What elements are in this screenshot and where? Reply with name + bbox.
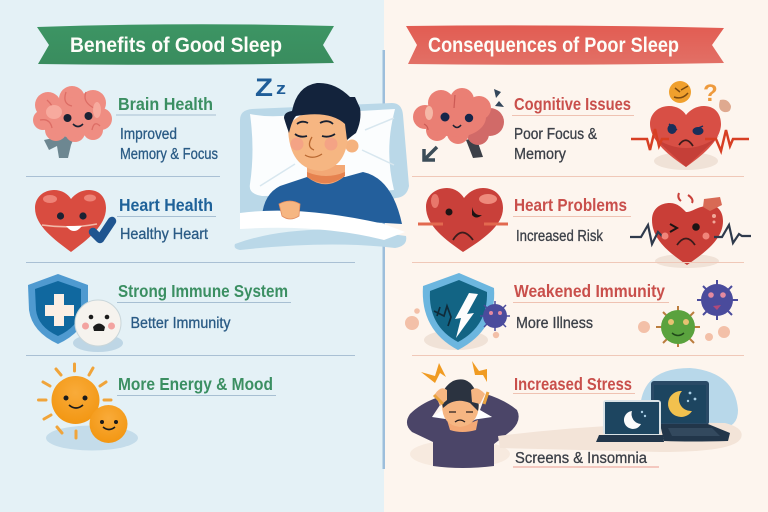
banner: benefits heading: Benefits of Good Sleep (70, 33, 282, 57)
heading: heart problems: Heart Problems (514, 195, 627, 215)
text: poor focus and memory: Memory (514, 146, 566, 163)
icon: laptops at night (498, 368, 742, 452)
icon: happy brain (33, 86, 112, 158)
icon: broken heart with heartbeat (630, 193, 751, 268)
text: poor focus and memory (514, 126, 598, 163)
heading: screens and insomnia: Screens & Insomnia (515, 450, 647, 467)
banner: consequences heading: Consequences of Poor Sleep (428, 33, 679, 57)
heading: brain health: Brain Health (118, 94, 213, 114)
text: improved memory and focus: Memory & Focus (120, 146, 218, 163)
text: more illness: More Illness (516, 315, 593, 332)
heading: heart health: Heart Health (119, 195, 213, 215)
heading: increased stress: Increased Stress (514, 374, 632, 394)
text: improved memory and focus: Improved (120, 126, 177, 143)
panel: consequences of poor sleep (405, 25, 751, 468)
icon: angry heart with heartbeat: ? (703, 80, 718, 107)
heading: weakened immunity: Weakened Immunity (514, 281, 665, 301)
panel: benefits of good sleep (26, 24, 355, 450)
text: poor focus and memory: Poor Focus & (514, 126, 598, 143)
text: better immunity: Better Immunity (130, 315, 231, 332)
illustration: person sleeping in bed (235, 74, 409, 250)
sleep letters (255, 74, 286, 102)
icon: cracked shield and virus (405, 273, 510, 350)
heading: cognitive issues: Cognitive Issues (514, 94, 631, 114)
icon: smiling viruses (638, 280, 738, 347)
text: improved memory and focus (120, 126, 218, 163)
heading: strong immune system: Strong Immune System (118, 281, 288, 301)
banner: benefits heading (37, 24, 334, 65)
text: increased risk: Increased Risk (516, 228, 603, 245)
sleep letters: z (276, 79, 286, 98)
heading: more energy and mood: More Energy & Mood (118, 374, 273, 394)
icon: worried brain (413, 88, 504, 160)
icon: angry heart with heartbeat (631, 80, 749, 170)
icon: shield and immune cell (28, 274, 123, 352)
icon: sad heart (418, 188, 508, 252)
banner: consequences heading (406, 25, 724, 65)
icon: smiling suns (38, 364, 138, 450)
icon: healthy heart with check (35, 190, 112, 252)
sleep letters: Z (255, 74, 273, 102)
icon: stressed person (407, 361, 519, 468)
text: healthy heart: Healthy Heart (120, 226, 209, 243)
